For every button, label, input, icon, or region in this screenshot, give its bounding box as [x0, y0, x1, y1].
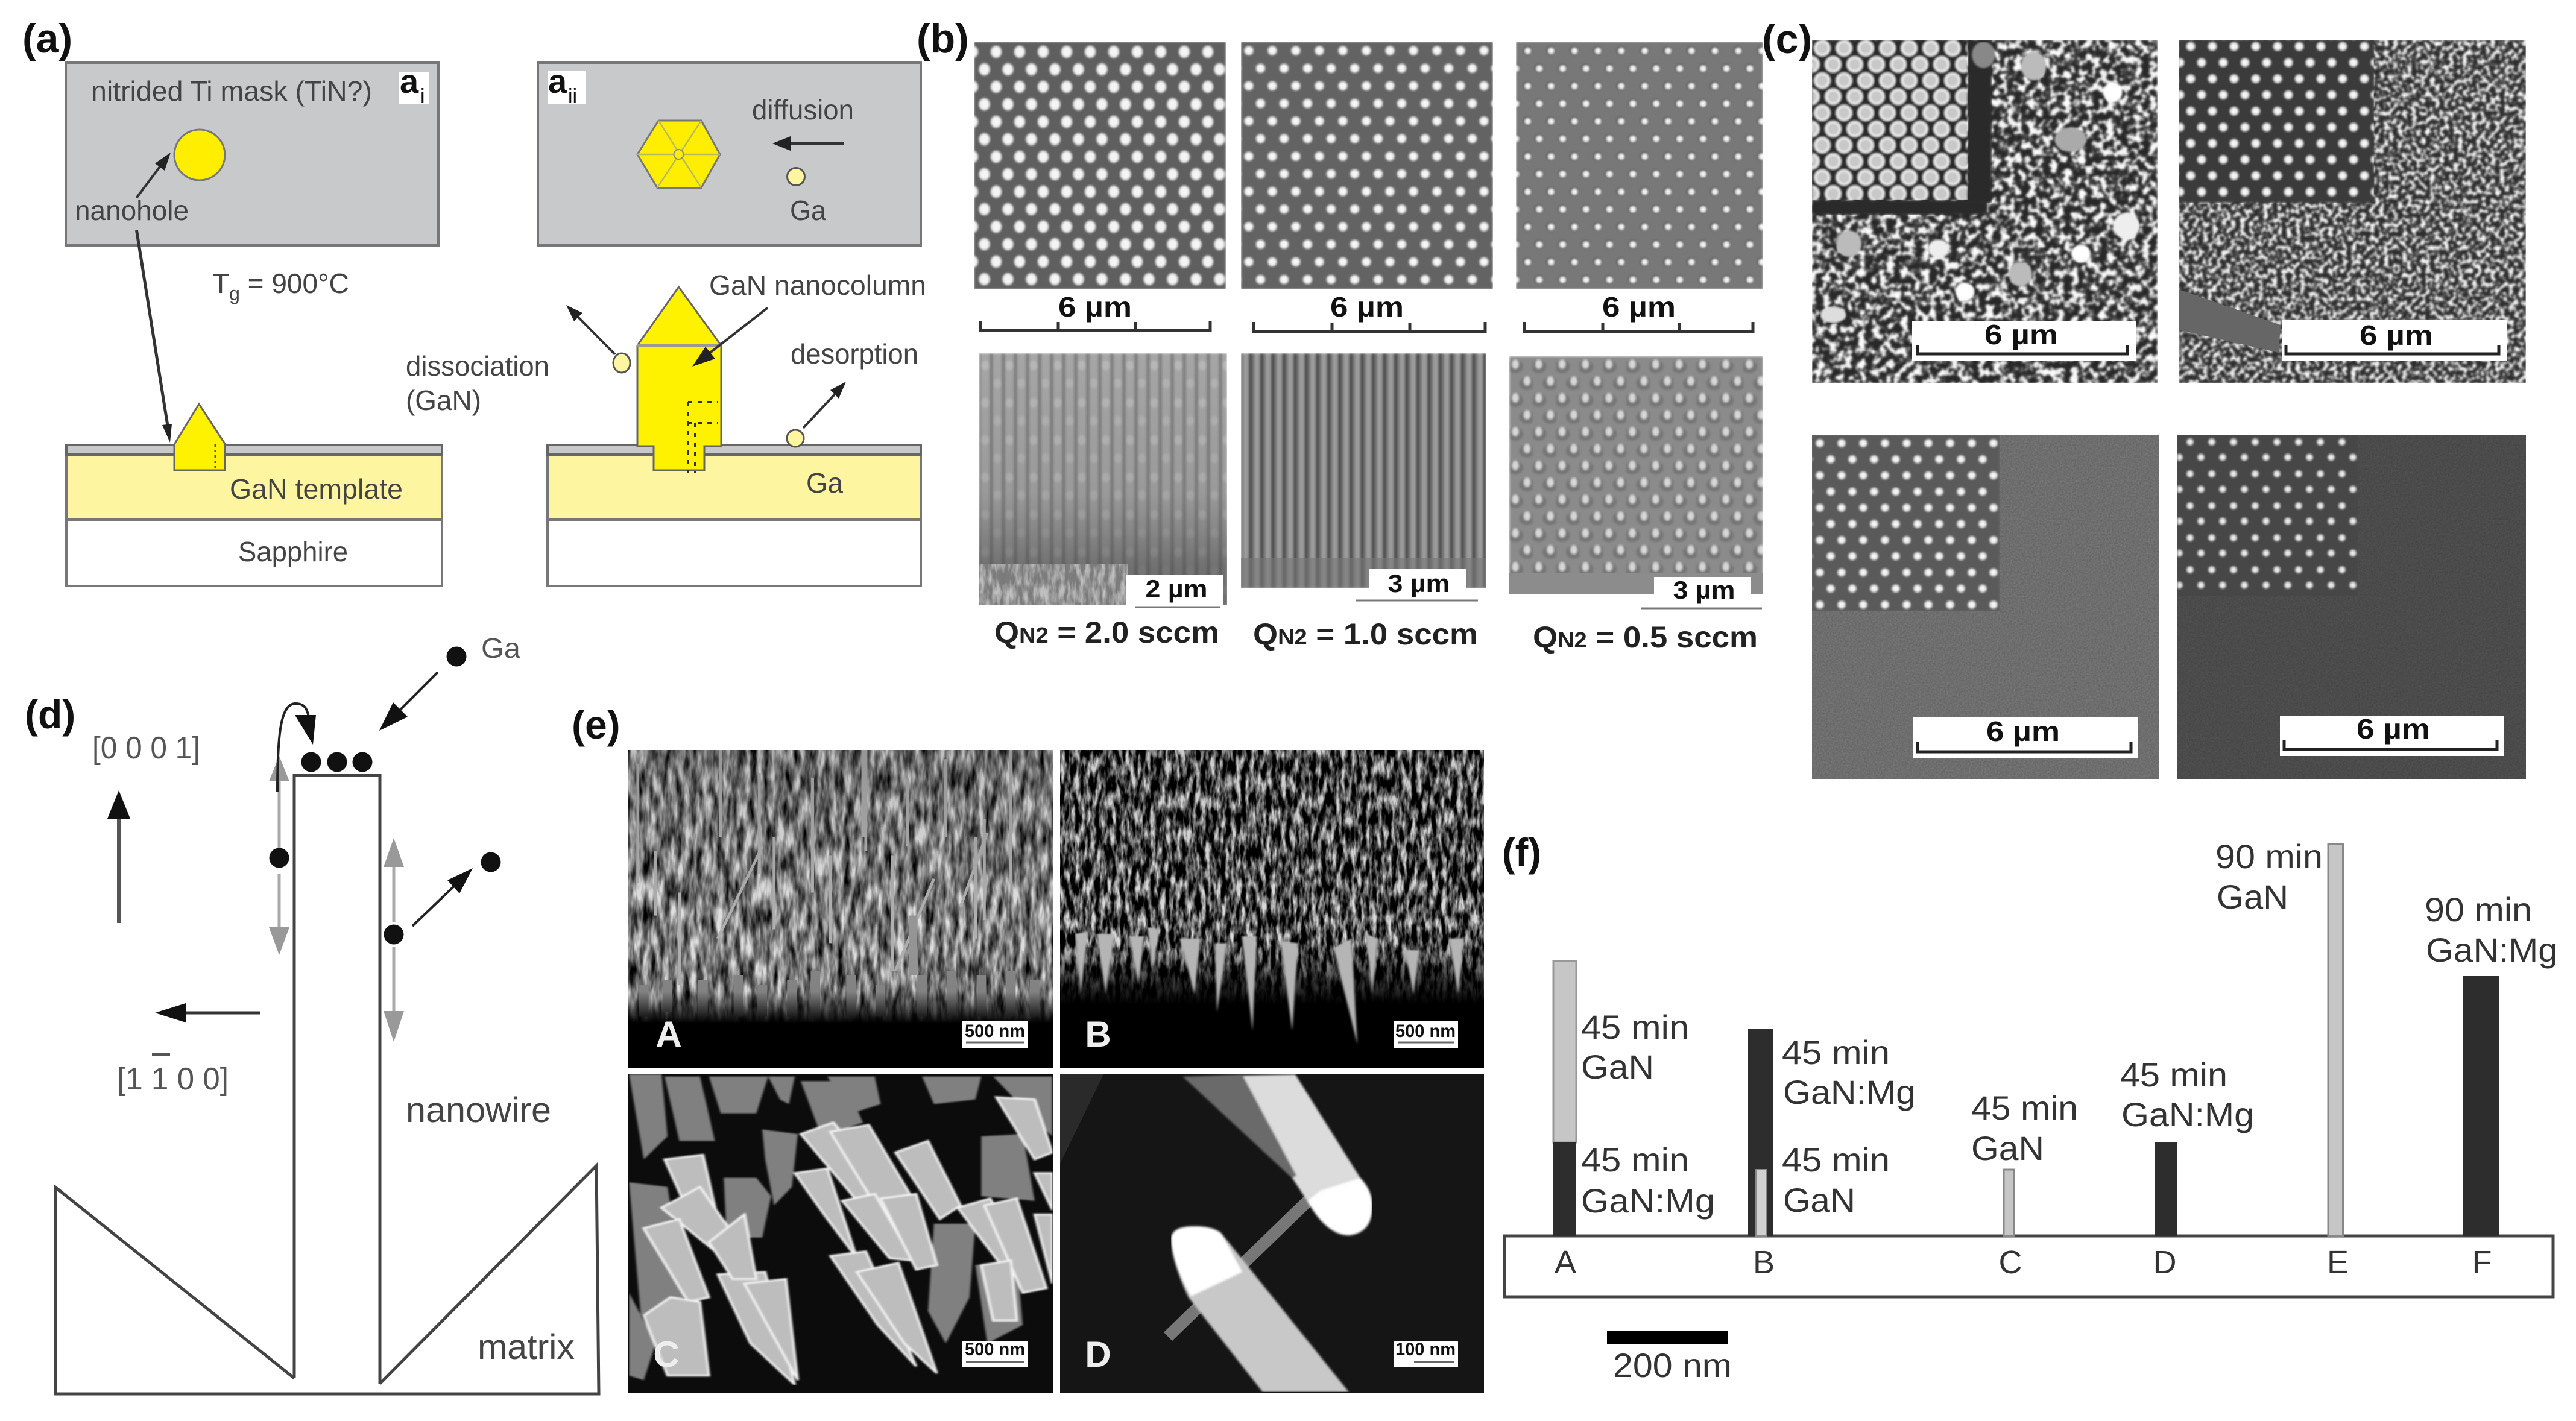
SEM image c4: smooth dark surface — [2177, 435, 2526, 779]
growth temperature label: = 900°C — [240, 268, 349, 299]
bar C: 45 min GaN — [1971, 1089, 2078, 1281]
column 2: 1.0 sccm: 3 µm — [1388, 569, 1450, 597]
SEM image c2: rough surface with smaller holes — [2179, 40, 2526, 383]
panel a: growth schematic — [22, 16, 926, 586]
GaN nanocolumn label with arrow: GaN nanocolumn — [709, 269, 926, 301]
bar A: GaN on GaN:Mg: A — [1555, 1244, 1576, 1281]
SEM image C: tapered faceted columns — [628, 1074, 1053, 1393]
substrate baseline box — [1504, 1236, 2553, 1297]
cross section right: GaN nanocolumn on template — [548, 287, 921, 586]
panel c: selective area SEM images — [1762, 16, 2526, 779]
[0001] direction arrow — [92, 731, 200, 923]
bar B: GaN:Mg around GaN: B — [1753, 1244, 1775, 1281]
panel label (b): (b) — [917, 16, 969, 61]
bar C: 45 min GaN: C — [1998, 1244, 2022, 1281]
SEM image A: nanowire forest — [628, 750, 1053, 1068]
column 1: 2.0 sccm: 6 µm — [1058, 291, 1132, 323]
top view aii: hexagonal nanocolumn with diffusion: diffusion — [752, 94, 854, 125]
matrix label: matrix — [478, 1328, 575, 1367]
bar E: 90 min GaN: GaN — [2217, 878, 2288, 916]
panel label (e): (e) — [572, 702, 620, 747]
SEM image c3: smooth grey surface: 6 µm — [1986, 716, 2060, 747]
bar F: 90 min GaN:Mg: GaN:Mg — [2426, 931, 2558, 969]
bar C: 45 min GaN: GaN — [1971, 1129, 2044, 1167]
nanowire label: nanowire — [406, 1091, 551, 1130]
bar B: GaN:Mg around GaN: GaN — [1783, 1181, 1855, 1219]
cross section left: GaN template on sapphire: Sapphire — [238, 536, 348, 567]
arrow from nanohole label to nucleus — [136, 230, 172, 443]
desorption label and adatom arrow: desorption — [791, 338, 918, 370]
SEM image c1: rough surface with large holes — [1812, 40, 2158, 383]
bar B: GaN:Mg around GaN: 45 min — [1782, 1141, 1890, 1179]
incoming Ga atom and arrow: Ga — [481, 632, 520, 664]
SEM image c2: rough surface with smaller holes: 6 µm — [2360, 320, 2433, 351]
top view ai: nitrided Ti mask: nanohole — [75, 195, 189, 226]
panel label (c): (c) — [1762, 16, 1812, 62]
bar E: 90 min GaN: E — [2327, 1244, 2349, 1281]
nanowire and matrix outline — [55, 775, 599, 1394]
bar E: 90 min GaN — [2215, 837, 2349, 1281]
bar A: GaN on GaN:Mg: GaN — [1581, 1048, 1654, 1086]
cross section left: GaN template on sapphire — [66, 404, 442, 586]
bar A: GaN on GaN:Mg: 45 min — [1581, 1008, 1689, 1046]
column 1: 2.0 sccm: 2 µm — [1146, 575, 1207, 603]
SEM image B: dense short nanowires — [1060, 750, 1484, 1068]
dissociation label and adatom arrow: dissociation — [406, 350, 549, 382]
bar A: GaN on GaN:Mg: 45 min — [1581, 1141, 1689, 1179]
right side diffusion arrows and desorbing atom — [384, 838, 500, 1042]
SEM image C: tapered faceted columns: 500 nm — [965, 1340, 1025, 1360]
SEM image D: single nanowire with contacts: 100 nm — [1395, 1340, 1456, 1360]
GaN nanocolumn label with arrow — [692, 269, 926, 367]
panel b: SEM images by nitrogen flow — [917, 16, 1763, 654]
incoming Ga atom and arrow — [379, 632, 520, 731]
[0001] direction arrow: [0 0 0 1] — [92, 731, 200, 766]
bar C: 45 min GaN: 45 min — [1971, 1089, 2078, 1127]
bar A: GaN on GaN:Mg — [1553, 961, 1715, 1281]
bar A: GaN on GaN:Mg: GaN:Mg — [1581, 1182, 1715, 1220]
top view aii: hexagonal nanocolumn with diffusion: a — [548, 62, 567, 100]
200 nm scale bar: 200 nm — [1613, 1346, 1732, 1384]
SEM image c4: smooth dark surface: 6 µm — [2357, 713, 2430, 745]
panel label (d): (d) — [25, 692, 75, 737]
top view aii: hexagonal nanocolumn with diffusion: ii — [568, 85, 577, 108]
column 1: 2.0 sccm: QN2 = 2.0 sccm — [994, 616, 1219, 649]
column 3: 0.5 sccm: 3 µm — [1673, 576, 1735, 604]
panel label (f): (f) — [1502, 830, 1541, 875]
bar F: 90 min GaN:Mg: 90 min — [2425, 890, 2532, 928]
panel e: SEM images A to D — [572, 702, 1484, 1393]
bar B: GaN:Mg around GaN: GaN:Mg — [1783, 1073, 1916, 1111]
SEM image A: nanowire forest: 500 nm — [965, 1021, 1025, 1041]
growth temperature label: g — [229, 283, 240, 304]
bar D: 45 min GaN:Mg: 45 min — [2120, 1056, 2227, 1094]
cross section left: GaN template on sapphire: GaN template — [230, 473, 403, 505]
SEM image B: dense short nanowires: 500 nm — [1395, 1021, 1456, 1041]
SEM image C: tapered faceted columns: C — [653, 1334, 680, 1375]
column 2: 1.0 sccm: 6 µm — [1330, 291, 1404, 323]
SEM image D: single nanowire with contacts: D — [1085, 1334, 1111, 1375]
bar F: 90 min GaN:Mg — [2425, 890, 2558, 1281]
bar B: GaN:Mg around GaN — [1748, 1029, 1916, 1281]
top view ai: nitrided Ti mask: i — [420, 85, 425, 108]
desorption label and adatom arrow — [787, 338, 918, 447]
SEM image B: dense short nanowires: B — [1085, 1014, 1111, 1054]
dissociation label and adatom arrow — [406, 305, 630, 416]
column 2: 1.0 sccm — [1241, 42, 1493, 651]
200 nm scale bar — [1607, 1331, 1732, 1384]
top view ai: nitrided Ti mask: nitrided Ti mask (TiN?) — [91, 75, 372, 107]
column 1: 2.0 sccm — [974, 42, 1227, 649]
bar B: GaN:Mg around GaN: 45 min — [1782, 1033, 1890, 1071]
bar D: 45 min GaN:Mg — [2120, 1056, 2254, 1281]
bar E: 90 min GaN: 90 min — [2215, 837, 2323, 875]
left side diffusion arrows and curved hop to tip — [269, 704, 316, 955]
SEM image c1: rough surface with large holes: 6 µm — [1984, 319, 2058, 350]
column 3: 0.5 sccm — [1509, 42, 1763, 654]
bar D: 45 min GaN:Mg: D — [2153, 1244, 2177, 1281]
dissociation label and adatom arrow: (GaN) — [406, 385, 481, 416]
column 3: 0.5 sccm: QN2 = 0.5 sccm — [1533, 620, 1758, 654]
[1-100] direction arrow — [117, 1003, 260, 1097]
SEM image D: single nanowire with contacts — [1060, 1074, 1484, 1393]
growth temperature label: T — [212, 268, 229, 299]
panel label (a): (a) — [22, 16, 72, 61]
top view aii: hexagonal nanocolumn with diffusion: Ga — [790, 195, 826, 226]
cross section right: GaN nanocolumn on template: Ga — [806, 467, 843, 499]
column 2: 1.0 sccm: QN2 = 1.0 sccm — [1253, 617, 1478, 651]
bar D: 45 min GaN:Mg: GaN:Mg — [2121, 1095, 2254, 1133]
column 3: 0.5 sccm: 6 µm — [1602, 291, 1676, 323]
bar F: 90 min GaN:Mg: F — [2472, 1244, 2492, 1281]
[1-100] direction arrow: [1 1 0 0] — [117, 1062, 229, 1097]
Ga adatoms on the nanowire tip — [301, 752, 373, 772]
panel f: nanowire length bar chart — [1502, 830, 2558, 1384]
SEM image A: nanowire forest: A — [655, 1014, 682, 1054]
top view aii: hexagonal nanocolumn with diffusion — [538, 62, 921, 245]
SEM image c3: smooth grey surface — [1812, 435, 2159, 779]
top view ai: nitrided Ti mask: a — [400, 62, 419, 100]
top view ai: nitrided Ti mask — [66, 62, 438, 245]
panel d: nanowire growth mechanism — [25, 632, 599, 1394]
